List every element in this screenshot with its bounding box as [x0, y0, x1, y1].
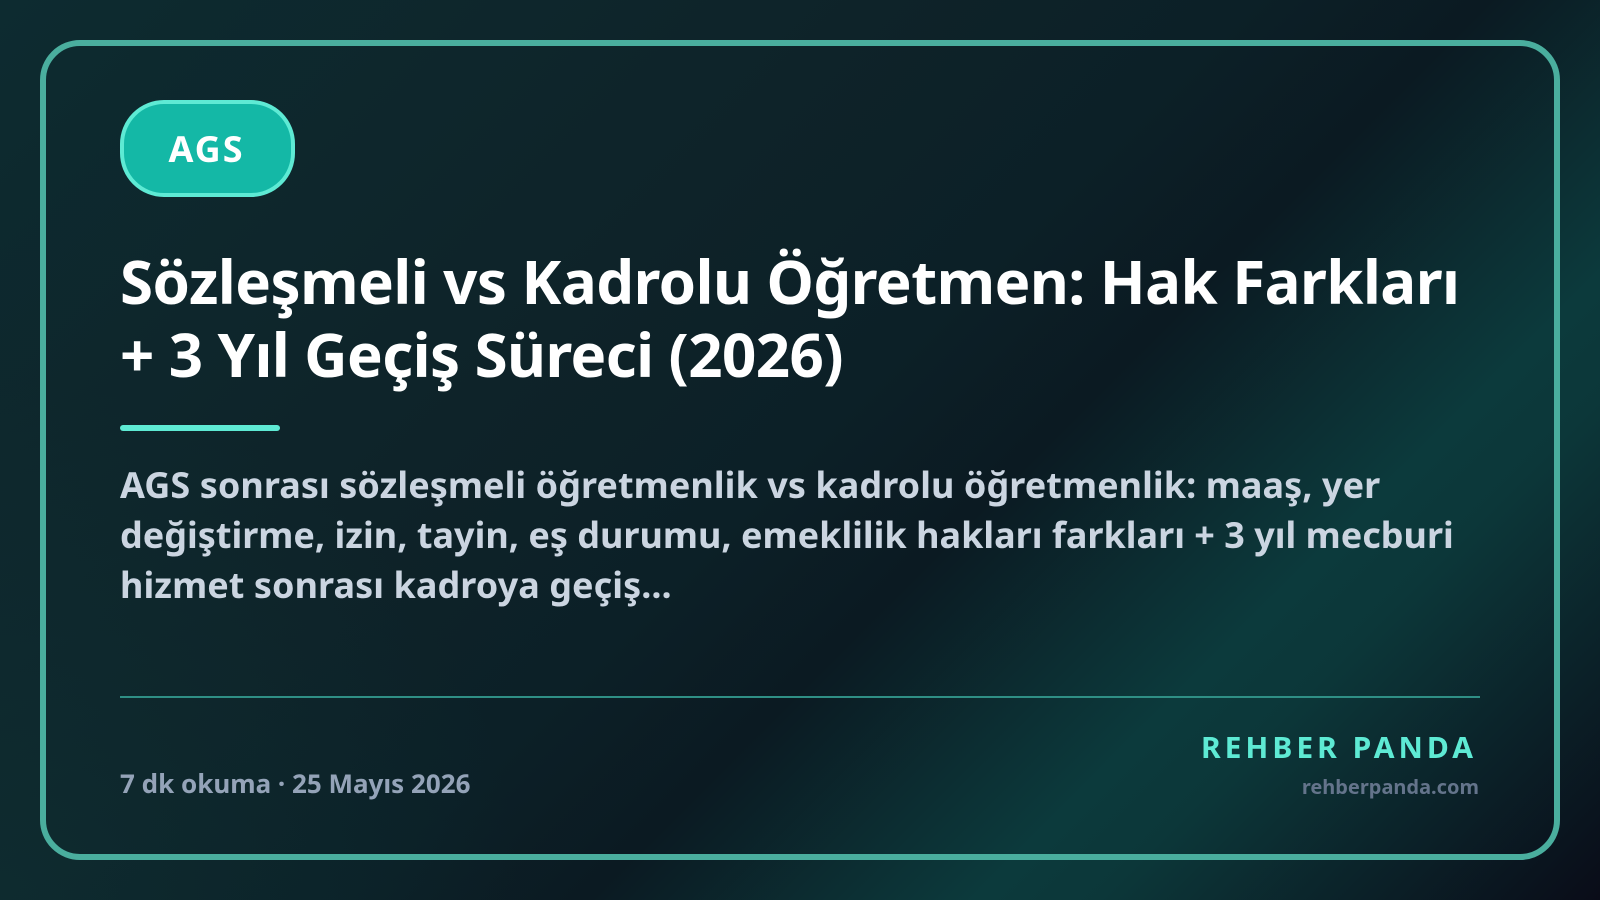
badge: AGS — [120, 100, 295, 197]
reading time and date: 7 dk okuma · 25 Mayıs 2026 — [120, 765, 470, 801]
title: + 3 Yıl Geçiş Süreci (2026) — [120, 313, 843, 395]
title — [120, 240, 1459, 395]
badge: AGS: AGS — [168, 124, 245, 173]
description: hizmet sonrası kadroya geçiş... — [120, 560, 672, 609]
website: rehberpanda.com — [1302, 773, 1479, 800]
description — [120, 460, 1454, 609]
divider — [120, 696, 1480, 698]
title: Sözleşmeli vs Kadrolu Öğretmen: Hak Farkları — [120, 240, 1459, 322]
description: değiştirme, izin, tayin, eş durumu, emeklilik hakları farkları + 3 yıl mecburi — [120, 510, 1454, 559]
description: AGS sonrası sözleşmeli öğretmenlik vs kadrolu öğretmenlik: maaş, yer — [120, 460, 1380, 509]
brand name: REHBER PANDA — [1201, 726, 1477, 767]
accent underline — [120, 425, 280, 431]
